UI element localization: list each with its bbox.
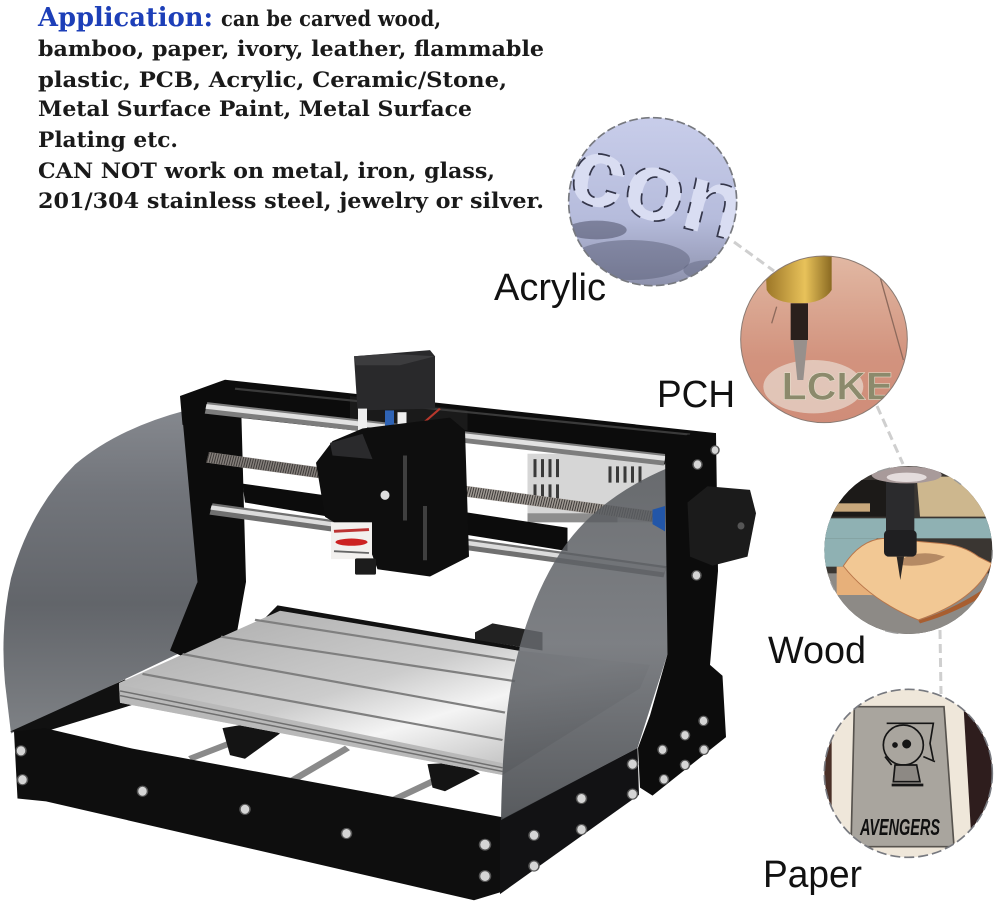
sample photo: PCB engraving: [737, 253, 913, 427]
gantry frame: [170, 380, 716, 658]
sample photo: wood: [823, 465, 993, 637]
right acrylic guard: [501, 468, 668, 820]
base opening: [131, 715, 502, 817]
sample photo: paper: [822, 688, 995, 858]
Y rods: [190, 732, 450, 800]
base inner rear: [10, 679, 145, 732]
application text block: [37, 3, 544, 213]
lower guide rail: [211, 508, 665, 572]
text line 2: bamboo, paper, ivory, leather, flammable: [38, 36, 544, 61]
base front plate: [14, 728, 502, 900]
frame screws: [16, 446, 719, 882]
upper guide rail: [206, 406, 665, 460]
connector: PCB to wood: [877, 406, 903, 464]
warning label: [331, 522, 372, 559]
label: PCH: PCH: [657, 374, 735, 416]
rear table beam: [265, 605, 520, 661]
label: Paper: Paper: [763, 854, 862, 896]
label: Acrylic: Acrylic: [494, 267, 606, 309]
connector: wood to paper: [940, 630, 941, 694]
bearing block left: [222, 723, 280, 759]
heading: Application: Application:: [37, 3, 213, 33]
Y stepper motor: [652, 486, 756, 566]
text line 3: plastic, PCB, Acrylic, Ceramic/Stone,: [38, 67, 507, 92]
CNC laser engraving machine: [3, 350, 756, 900]
connector: acrylic to PCB: [734, 242, 774, 271]
T-slot work table: [119, 611, 650, 775]
cartoon figure: [883, 723, 935, 785]
control board behind frame: [528, 454, 668, 522]
text line 4: Metal Surface Paint, Metal Surface: [38, 96, 472, 121]
text line 6: CAN NOT work on metal, iron, glass,: [38, 158, 495, 183]
laser carriage: [316, 418, 469, 576]
rear motor: [475, 623, 542, 650]
lead screw: [208, 457, 656, 517]
laser nozzle: [355, 558, 376, 575]
text line 7: 201/304 stainless steel, jewelry or silver.: [38, 188, 544, 213]
sample photo: paper: AVENGERS: [859, 814, 940, 840]
bearing block right: [428, 762, 480, 791]
X stepper motor: [354, 350, 440, 454]
base side plate: [500, 748, 639, 894]
left acrylic guard: [3, 410, 198, 733]
text line 5: Plating etc.: [38, 127, 178, 152]
right frame upright: [638, 433, 726, 796]
sample photo: PCB engraving: LCKE: [782, 364, 893, 408]
sample photo: acrylic: con: [560, 114, 757, 261]
text line 1: can be carved wood,: [221, 6, 441, 31]
label: Wood: Wood: [768, 630, 866, 672]
machine base: [10, 679, 639, 900]
